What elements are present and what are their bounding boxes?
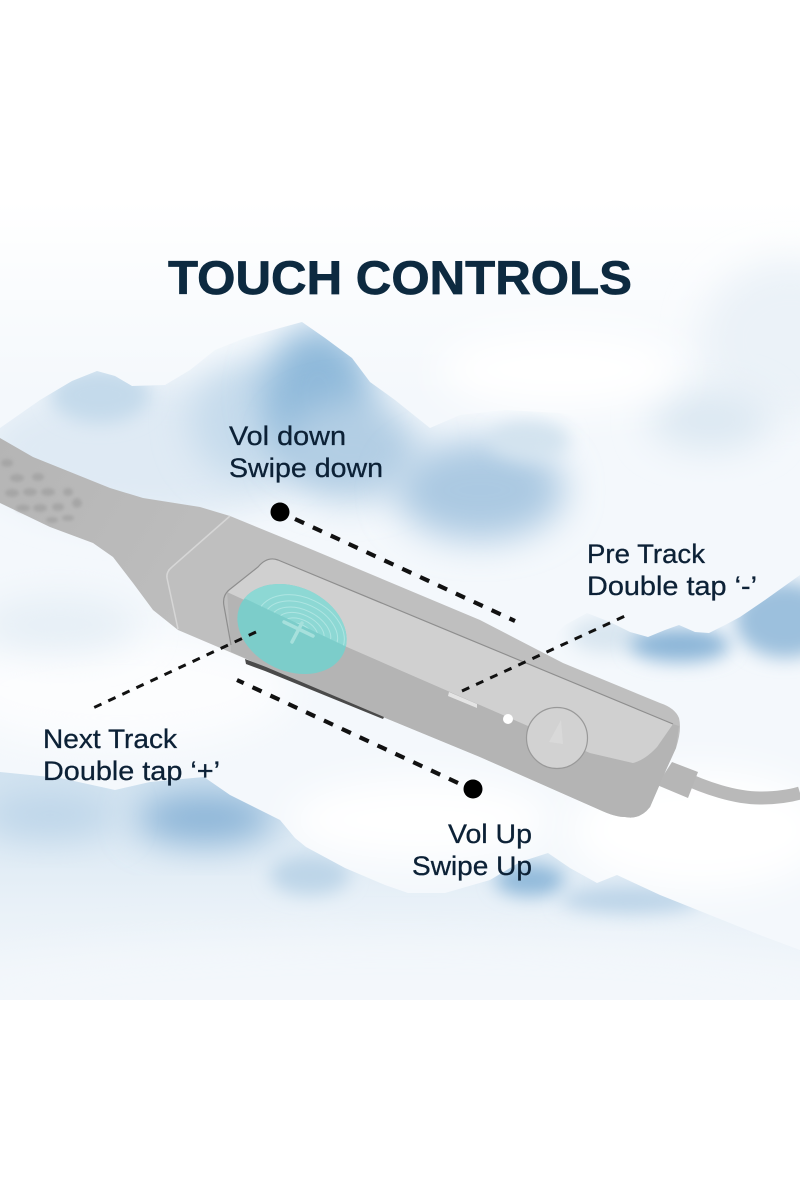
multifunction button	[526, 708, 588, 768]
label: next track: Next Track	[43, 724, 178, 754]
label: vol down: Vol down	[229, 421, 346, 451]
product: neckband remote	[0, 438, 800, 818]
background: upper mountain range	[0, 325, 570, 540]
body shell	[167, 516, 680, 818]
lower facet	[227, 590, 679, 818]
label: vol up	[412, 819, 532, 881]
neck and grip	[0, 438, 230, 630]
label: next track	[43, 724, 220, 786]
fingerprint touch zone	[237, 584, 347, 674]
label: vol up: Swipe Up	[412, 851, 532, 881]
plus symbol	[284, 622, 313, 642]
label: next track: Double tap ‘+’	[43, 756, 220, 786]
label: vol up: Vol Up	[448, 819, 532, 849]
label: pre track	[587, 539, 757, 601]
cable	[680, 776, 800, 798]
background: misty mountain painting	[0, 252, 800, 1000]
background: lower mountain range	[0, 772, 756, 936]
dark side button	[245, 659, 384, 719]
LED dot	[503, 714, 513, 724]
panel outline	[224, 559, 673, 724]
callout: next track dotted line	[93, 632, 256, 708]
callout: vol down dashed line	[270, 502, 515, 621]
seam line	[167, 516, 230, 629]
touch panel	[227, 559, 673, 763]
callout: pre track dotted line	[462, 616, 625, 691]
label: pre track: Pre Track	[587, 539, 706, 569]
background: right mountain ridge	[570, 582, 800, 662]
label: vol down: Swipe down	[229, 453, 383, 483]
callout: vol up dashed line	[237, 680, 482, 798]
label: vol down	[229, 421, 383, 483]
LED slot	[448, 692, 477, 708]
title: TOUCH CONTROLS	[168, 251, 632, 304]
background: white mist over device	[0, 635, 290, 745]
strain relief	[657, 762, 698, 798]
grip texture	[1, 459, 82, 523]
label: pre track: Double tap ‘-’	[587, 571, 757, 601]
